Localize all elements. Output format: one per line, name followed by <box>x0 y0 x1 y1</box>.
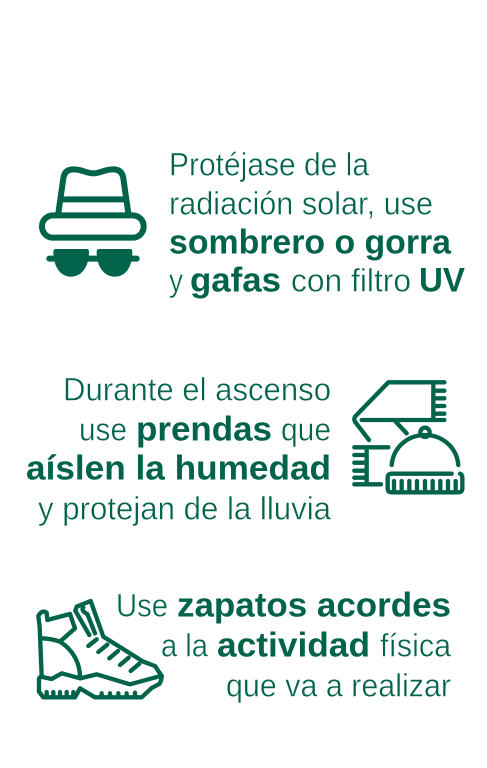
text: sun protection advice: y <box>169 263 183 299</box>
text: sun protection advice: con filtro <box>291 263 411 299</box>
text: footwear advice: actividad <box>217 627 370 665</box>
panel: sun protection <box>42 147 465 300</box>
text: clothing advice: y protejan de la lluvia <box>38 491 331 527</box>
text: footwear advice: a la <box>161 628 208 664</box>
text: footwear advice: física <box>380 628 451 664</box>
text: sun protection advice: UV <box>419 262 465 300</box>
text: sun protection advice: sombrero o gorra <box>169 224 452 262</box>
text: footwear advice <box>116 587 451 704</box>
panel: rain clothing <box>26 372 462 527</box>
panel: footwear <box>38 587 451 704</box>
icon: hat and sunglasses <box>42 169 144 277</box>
text: clothing advice: aíslen la humedad <box>26 450 331 488</box>
text: clothing advice <box>26 372 331 527</box>
text: footwear advice: zapatos acordes <box>177 587 451 625</box>
text: clothing advice: Durante el ascenso <box>63 372 331 408</box>
text: clothing advice: use <box>79 412 127 448</box>
text: sun protection advice <box>169 147 465 300</box>
text: clothing advice: que <box>281 412 331 448</box>
text: clothing advice: prendas <box>136 411 272 449</box>
icon: scarf and wool hat <box>354 382 462 492</box>
text: footwear advice: Use <box>116 588 168 624</box>
text: footwear advice: que va a realizar <box>226 668 451 704</box>
text: sun protection advice: Protéjase de la <box>169 147 369 183</box>
text: sun protection advice: radiación solar, use <box>169 186 433 222</box>
icon: hiking boot <box>38 601 162 697</box>
text: sun protection advice: gafas <box>190 262 281 300</box>
